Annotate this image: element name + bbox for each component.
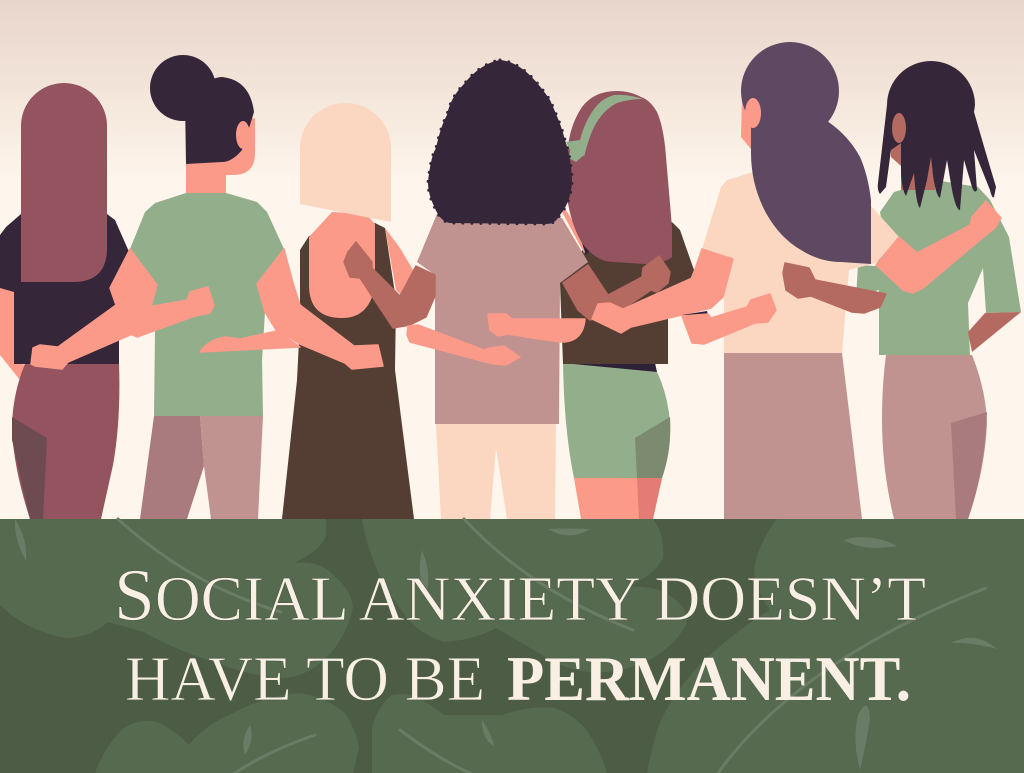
headline bold text: PERMANENT. xyxy=(507,643,911,714)
woman 5: headband and green shorts xyxy=(560,91,694,519)
leaf spots xyxy=(15,519,997,770)
arm: woman 4 around woman 5 xyxy=(563,256,670,320)
arm: woman 5 behind woman 6 xyxy=(682,294,776,344)
arm: woman 4 dark arm xyxy=(344,242,435,328)
arm: woman 3 behind woman 2 xyxy=(200,331,300,352)
woman 3: blonde bob and brown dress xyxy=(282,103,414,519)
woman 7: dark braids and green shirt xyxy=(856,61,1021,519)
woman 1: long maroon hair xyxy=(0,83,130,519)
leaves xyxy=(0,519,1024,773)
headline line 2 xyxy=(125,643,911,714)
headline regular text: HAVE TO BE xyxy=(125,643,485,714)
arm: woman 7 dark arm behind woman 6 xyxy=(783,263,886,313)
linked arms xyxy=(31,201,1001,369)
arm: woman 5 behind woman 4 xyxy=(488,314,585,342)
woman 2: hair bun and green shirt xyxy=(130,55,284,519)
headline xyxy=(114,555,926,714)
arm: woman 2 around woman 3 xyxy=(257,249,383,369)
woman 6: long purple hair and peach shirt xyxy=(702,42,899,519)
background xyxy=(0,0,1024,519)
green footer panel xyxy=(0,519,1024,773)
arm: woman 3 behind woman 4 xyxy=(407,325,520,365)
leaf veins xyxy=(118,519,986,773)
arm: woman 1 behind woman 2 xyxy=(128,287,214,337)
woman 4: curly hair and mauve shirt xyxy=(417,60,588,519)
headband xyxy=(566,95,643,162)
arm: woman 6 around woman 7 xyxy=(876,201,1001,293)
arm: woman 6 around woman 5 xyxy=(592,249,733,333)
arm: woman 2 around woman 1 xyxy=(31,249,157,369)
headline line 1: SOCIAL ANXIETY DOESN’T xyxy=(114,555,926,637)
